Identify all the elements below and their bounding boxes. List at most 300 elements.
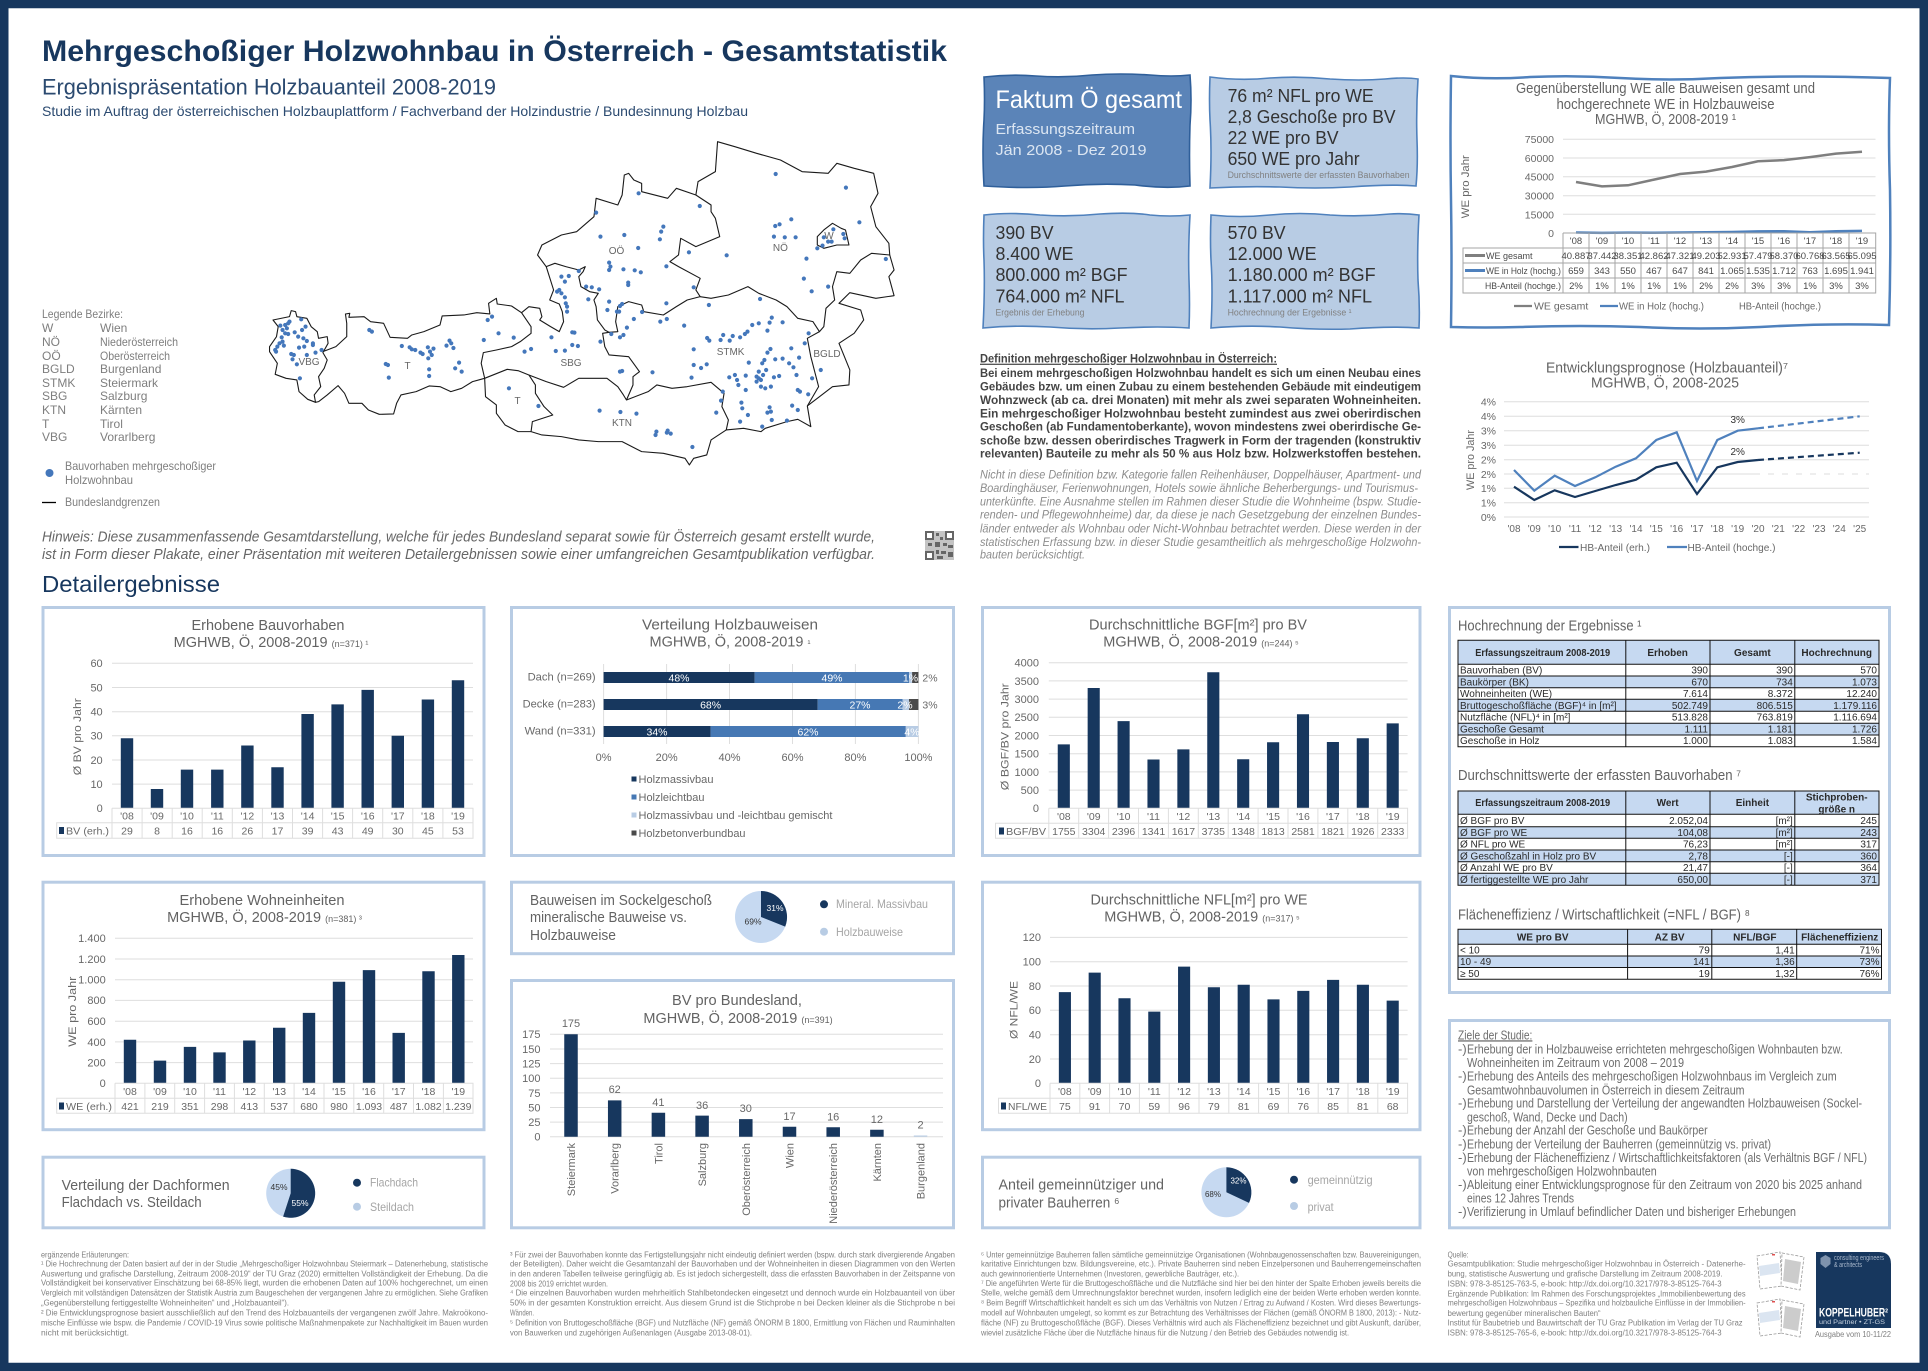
pie legend: Flachdach (370, 1176, 418, 1190)
data table: '18 (421, 810, 435, 822)
text block: definition: relevanten) Bauteile zu mehr als 50 % aus Holz bzw. Holzwerkstoffen bestehen. (980, 447, 1421, 461)
y axis: 50 (528, 1102, 540, 1114)
box: average values (1210, 77, 1418, 188)
chart legend: Holzbetonverbundbau (638, 828, 746, 840)
footnotes column 3: ⁸ Beim Begriff Wirtschaftlichkeit handelt es sich um das Verhältnis von Nutzen / Ertrag zu Aufwand / Kosten. Wird dieses Bewertungs- (981, 1299, 1421, 1308)
bar labels: 3% (922, 700, 938, 712)
bars (1065, 967, 1393, 1083)
table: Durchschnittswerte: 21,47 (1683, 863, 1708, 874)
text block: definition (980, 351, 1422, 562)
data table: '11 (211, 810, 224, 822)
chart title: MGHWB, Ö, 2008-2019 (n=381) ³ (167, 908, 362, 926)
data table: '10 (1117, 811, 1131, 823)
data table: 2% (1569, 281, 1583, 292)
x axis: '25 (1853, 524, 1867, 535)
title: Mehrgeschoßiger Holzwohnbau in Österreich - Gesamtstatistik (42, 35, 947, 68)
data table: 47.321 (1665, 251, 1695, 262)
table: Flächeneffizienz: 1,41 (1775, 946, 1795, 957)
x axis: '22 (1792, 524, 1806, 535)
note: Hinweis: Hinweis: Diese zusammenfassende Gesamtdarstellung, welche für jedes Bundesland separat sowie für Österreich gesamt erstellt wurde, (42, 528, 875, 546)
x axis: '08 (1507, 524, 1521, 535)
table: Flächeneffizienz: 79 (1699, 946, 1710, 957)
study goals list: Gesamtwohnbauvolumen in Österreich in diesem Zeitraum (1467, 1082, 1744, 1097)
table: Hochrechnung: Gesamt (1734, 648, 1771, 659)
data table: '12 (1674, 236, 1686, 247)
panel: Ziele der Studie (1450, 1020, 1890, 1228)
icon: publication thumbnail top (1757, 1252, 1804, 1290)
table: Flächeneffizienz: ≥ 50 (1460, 969, 1480, 980)
pie chart (1201, 1167, 1251, 1217)
text block: definition: renden- und Pflegewohnheime) dar, da diese je nach Gesetzgebung der einzelnen Bundes- (980, 510, 1421, 522)
data table: 29 (121, 826, 133, 838)
table: Flächeneffizienz: 1,32 (1775, 969, 1795, 980)
footnotes column 3: karitative Einrichtungen bzw. Bildungsvereine, etc.). Private Bauherren sind neben Einzelpersonen und Bauherrengemeinschaften (981, 1260, 1421, 1269)
data table: '10 (1118, 1086, 1132, 1098)
logo: Koppelhuber (1816, 1252, 1891, 1328)
y axis: 2% (1481, 469, 1496, 481)
data table: 79 (1208, 1101, 1220, 1113)
y axis: 125 (522, 1058, 540, 1070)
chart legend (632, 774, 832, 840)
footnotes column 1: „Gegenüberstellung fertiggestellte Wohneinheiten“ und „Holzbauanteil“). (41, 1299, 289, 1308)
study goals list: -) (1458, 1177, 1467, 1192)
table: Hochrechnung: 570 (1860, 666, 1877, 676)
legend: districts: Niederösterreich (100, 335, 178, 349)
panel: Erhobene Bauvorhaben (43, 608, 484, 856)
study goals list: Erhebung der in Holzbauweise errichteten mehrgeschoßigen Wohnbauten bzw. (1467, 1041, 1843, 1056)
table: Hochrechnung: Baukörper (BK) (1460, 677, 1529, 688)
table: Hochrechnung: 763.819 (1757, 713, 1793, 724)
bar labels: 68% (700, 700, 721, 712)
y axis: 60000 (1525, 153, 1554, 165)
y axis: 25 (528, 1117, 540, 1129)
data table: 8 (154, 826, 160, 838)
table: Flächeneffizienz: 71% (1859, 946, 1880, 957)
pie chart (266, 1169, 315, 1218)
chart title: MGHWB, Ö, 2008-2019 (n=244) ⁵ (1103, 633, 1299, 651)
data table: '14 (301, 810, 315, 822)
box: extrapolation: Hochrechnung der Ergebnisse ¹ (1228, 308, 1352, 318)
logo: Koppelhuber: KOPPELHUBER² (1819, 1308, 1888, 1320)
legend: districts: Steiermark (100, 376, 159, 390)
data table: '14 (1237, 1086, 1251, 1098)
text block: definition: Nicht in diese Definition bzw. Kategorie fallen Reihenhäuser, Doppelhäuser, Apartment- und (980, 469, 1422, 481)
pie chart: 31% (766, 903, 784, 913)
y axis: WE pro Jahr (1465, 430, 1477, 490)
data table: 81 (1357, 1101, 1369, 1113)
heading: Detailergebnisse: Detailergebnisse (42, 571, 220, 597)
chart title (167, 893, 362, 926)
bar labels (646, 672, 938, 738)
y axis: 3% (1481, 440, 1496, 452)
footnotes column 3 (980, 1250, 1421, 1338)
data table: 1821 (1321, 826, 1345, 838)
footnotes column 2: ⁴ Die einzelnen Bauvorhaben wurden mehrheitlich Stahlbetondecken eingesetzt und dennoch wurde ein Holzbauanteil von über (510, 1289, 955, 1298)
y axis: WE pro Jahr (67, 976, 79, 1047)
data table: 3% (1751, 281, 1765, 292)
panel: Verteilung Holzbauweisen (512, 608, 954, 856)
legend: districts: KTN (42, 403, 66, 417)
data table: 57.479 (1743, 251, 1773, 262)
value labels: 12 (871, 1114, 883, 1126)
chart title: MGHWB, Ö, 2008-2019 ¹ (1595, 110, 1736, 128)
value labels: 175 (562, 1018, 580, 1030)
data table: '13 (1206, 811, 1220, 823)
study goals list: Erhebung der Anzahl der Geschoße und Baukörper (1467, 1123, 1708, 1138)
table: Hochrechnung: 1.000 (1683, 736, 1708, 747)
table: Hochrechnung: 8.372 (1768, 689, 1793, 700)
x axis: '24 (1833, 524, 1846, 535)
data table: '11 (1148, 1086, 1161, 1098)
table: Durchschnittswerte: [m²] (1776, 828, 1793, 839)
x axis: '15 (1650, 524, 1663, 535)
footnotes column 1: nicht mit berücksichtigt. (41, 1329, 129, 1338)
data table: '19 (451, 810, 465, 822)
data table: 49.203 (1691, 251, 1721, 262)
table: Hochrechnung: 390 (1691, 666, 1708, 676)
bars (127, 680, 458, 808)
data table: 16 (181, 826, 193, 838)
category labels: Salzburg (697, 1143, 709, 1186)
x axis: '10 (1548, 524, 1562, 535)
y axis: 75000 (1525, 134, 1554, 146)
legend: districts: Burgenland (100, 362, 161, 376)
y axis: 30000 (1525, 191, 1554, 203)
table: Flächeneffizienz: 141 (1693, 957, 1710, 968)
x axis: '20 (1751, 524, 1765, 535)
data table: '16 (361, 810, 375, 822)
panel text (530, 893, 712, 944)
y axis: 100 (1023, 956, 1041, 968)
map of Austria: W (824, 231, 834, 242)
table: Flächeneffizienz: 76% (1859, 969, 1880, 980)
data table: 647 (1672, 266, 1688, 277)
box: average values: Durchschnittswerte der erfassten Bauvorhaben (1228, 170, 1410, 180)
panel: NFL pro WE (982, 882, 1420, 1130)
chart title: Entwicklungsprognose (Holzbauanteil)⁷ (1546, 361, 1788, 377)
data table: '15 (331, 810, 345, 822)
study goals list: Wohneinheiten im Zeitraum von 2008 – 2019 (1467, 1055, 1684, 1070)
y axis: 175 (522, 1029, 540, 1041)
data table: '14 (1726, 236, 1738, 247)
data table: 980 (330, 1101, 348, 1113)
table: Flächeneffizienz: NFL/BGF (1733, 932, 1776, 943)
study goals list: Verifizierung in Umlauf befindlicher Daten und bisheriger Erhebungen (1467, 1204, 1796, 1219)
data table: '16 (362, 1086, 376, 1098)
bar labels: 2% (922, 672, 938, 684)
footnotes column 1: Vollständigkeit bei konservativer Einschätzung bei 68-85% liegt, wurden die erhobenen Daten auf 100% hochgerechnet, um einen (41, 1279, 488, 1288)
data table: 2396 (1112, 826, 1135, 838)
map of Austria: KTN (612, 418, 632, 429)
x axis: '13 (1609, 524, 1623, 535)
data table (57, 808, 473, 838)
data table: '18 (422, 1086, 436, 1098)
footnotes column 2: in den anderen Tabellen teilweise geringfügig ab. Es ist jedoch sichergestellt, dass die erfassten Bauvorhaben in der Zeitspanne von (510, 1270, 955, 1279)
data table: '17 (392, 1086, 406, 1098)
pie chart: 55% (291, 1198, 309, 1208)
y axis: 200 (87, 1058, 106, 1070)
table: Durchschnittswerte: 364 (1860, 863, 1877, 874)
panel: Sockelgeschoß (512, 882, 954, 954)
text block: definition: Wohnzweck (ab ca. drei Monaten) mit mehr als zwei separaten Wohneinheiten. (980, 393, 1421, 407)
x axis: '23 (1812, 524, 1826, 535)
y axis: 30 (90, 730, 103, 742)
data table: 1926 (1351, 826, 1375, 838)
data table: 1755 (1052, 826, 1076, 838)
footnotes column 3: modell auf Wohnbauten umgelegt, so kommt es zur Betrachtung des Verhältnisses der Flächen (gemäß ÖNORM B 1800, 2013): - Nutz- (981, 1308, 1421, 1317)
data table: 413 (241, 1101, 258, 1113)
category labels: Niederösterreich (828, 1143, 840, 1224)
data table: 30 (392, 826, 404, 838)
data table: 467 (1646, 266, 1662, 277)
panel: Bauherren (982, 1157, 1420, 1228)
y axis: 800 (87, 995, 106, 1007)
data table (996, 808, 1408, 838)
table: Durchschnittswerte: Erfassungszeitraum 2008-2019 (1475, 798, 1611, 809)
table: Durchschnittswerte: 360 (1860, 851, 1877, 862)
table: Durchschnittswerte: Einheit (1736, 798, 1770, 809)
chart legend: HB-Anteil (erh.) (1580, 542, 1650, 554)
data table: '14 (302, 1086, 316, 1098)
panel text: mineralische Bauweise vs. (530, 910, 687, 926)
table: Durchschnittswerte: [-] (1784, 851, 1793, 862)
data table: 298 (211, 1101, 228, 1113)
table: Hochrechnung: 502.749 (1672, 701, 1708, 712)
y axis: 4% (1481, 411, 1496, 423)
y axis: 1.200 (78, 954, 106, 966)
table: Flächeneffizienz: 1,36 (1775, 957, 1795, 968)
legend: project dot (46, 459, 216, 487)
map of Austria: SBG (560, 358, 582, 369)
data table: 76 (1297, 1101, 1309, 1113)
y axis (1460, 134, 1554, 240)
data table: '17 (1804, 236, 1816, 247)
data table: '19 (1386, 1086, 1400, 1098)
table: Durchschnittswerte: 245 (1860, 816, 1877, 827)
category labels: Decke (n=283) (523, 699, 596, 711)
data table: 52.931 (1717, 251, 1747, 262)
footnotes column 3: Stelle, welche gemäß dem Umrechnungsfaktor berechnet wurden, insofern lediglich eine der beiden Werte erhoben werden konnte. (981, 1289, 1421, 1298)
study goals list: -) (1458, 1069, 1467, 1084)
chart title: Durchschnittliche NFL[m²] pro WE (1090, 892, 1308, 908)
data table: HB-Anteil (hochge.) (1485, 281, 1561, 291)
data table: 351 (181, 1101, 199, 1113)
table: Durchschnittswerte: [-] (1784, 875, 1793, 886)
footnotes column 2: der Beteiligten). Daher weicht die Gesamtanzahl der Bauvorhaben und der Wohneinheiten in diesen Diagrammen von den Werten (510, 1260, 955, 1269)
category labels (523, 672, 596, 738)
pie legend: Steildach (370, 1200, 414, 1214)
y axis: 0 (97, 803, 103, 815)
table: Flächeneffizienz: 73% (1859, 957, 1880, 968)
data table: 60.768 (1795, 251, 1825, 262)
footnotes column 1: Auswertung und grafische Darstellung, Zeitraum 2008-2019“ der TU Graz (2020) ermittelten Vollständigkeit der Erhebung. Da die (41, 1269, 488, 1278)
text block: definition: Boardinghäuser, Ferienwohnungen, Hotels sowie ähnliche Beherbergungs- und Tourismus- (980, 483, 1418, 495)
data table: '09 (150, 810, 164, 822)
pie chart (735, 891, 787, 943)
chart title: MGHWB, Ö, 2008-2019 ¹ (650, 633, 810, 651)
data table: 39 (302, 826, 314, 838)
data table: '12 (1177, 1086, 1191, 1098)
y axis: 2000 (1015, 730, 1039, 742)
y axis: 150 (522, 1044, 540, 1056)
data table: 75 (1059, 1101, 1071, 1113)
y axis: 60 (1029, 1005, 1041, 1017)
subtitle: Ergebnispräsentation Holzbauanteil 2008-2019 (42, 74, 496, 100)
panel: comparison chart WE (1450, 76, 1890, 328)
pie chart: 45% (270, 1182, 288, 1192)
box: extrapolation: 1.117.000 m² NFL (1228, 286, 1372, 307)
table: Hochrechnung: Geschoße Gesamt (1460, 724, 1544, 736)
data table: '15 (1267, 1086, 1281, 1098)
sources: Quelle: (1448, 1250, 1469, 1259)
text block: definition: Gebäudes bzw. um einen Zubau zu einem bestehenden Gebäude mit eindeutigem (980, 379, 1421, 393)
footnotes column 3: ⁶ Unter gemeinnützige Bauherren fallen sämtliche gemeinnützige Organisationen (Wohnbaugenossenschaften bzw. Bauvereinigungen, (981, 1250, 1421, 1259)
stacked bars (604, 672, 918, 737)
value labels: 2 (918, 1120, 924, 1132)
y axis: 0% (1481, 512, 1496, 524)
data table: 1.535 (1746, 266, 1770, 277)
panel: BGF pro BV (982, 608, 1420, 856)
y axis: 1% (1481, 483, 1496, 495)
text block: definition: schoße bzw. dessen oberirdisches Tragwerk in Form der tragenden (konstruktiv (980, 433, 1421, 447)
chart title: Erhobene Wohneinheiten (180, 893, 344, 909)
bar labels: 1% (903, 672, 918, 684)
chart title (1546, 361, 1788, 392)
data table: '12 (242, 1086, 256, 1098)
study goals list: von mehrgeschoßigen Holzwohnbauten (1467, 1163, 1657, 1178)
panel: BV pro Bundesland (512, 980, 954, 1228)
y axis: 15000 (1525, 209, 1554, 221)
legend: districts: VBG (42, 430, 67, 444)
data table: 3304 (1082, 826, 1106, 838)
chart legend (1559, 542, 1776, 554)
table: Hochrechnung: 1.726 (1852, 724, 1877, 736)
data table: 1.941 (1850, 266, 1874, 277)
footnotes column 2: ⁵ Definition von Bruttogeschoßfläche (BGF) und Nutzfläche (NF) gemäß ÖNORM B 1800, Ermittlung von Flächen und Rauminhalten (510, 1319, 955, 1328)
box: survey result: 8.400 WE (996, 243, 1074, 264)
table: Durchschnittswerte: 76,23 (1683, 840, 1708, 851)
text block: definition: Definition mehrgeschoßiger Holzwohnbau in Österreich: (980, 351, 1277, 366)
x axis: '11 (1569, 524, 1582, 535)
y axis: 50 (90, 682, 103, 694)
study goals list: -) (1458, 1204, 1467, 1219)
data table: 1.239 (445, 1101, 472, 1113)
y axis: Ø BV pro Jahr (72, 698, 84, 775)
bar labels: 27% (849, 700, 871, 712)
x axis (1507, 524, 1867, 535)
data table: 17 (272, 826, 283, 838)
y axis: 0 (100, 1078, 106, 1090)
data table: 421 (121, 1101, 139, 1113)
footnotes column 3: auch gewinnorientierte Unternehmen (Investoren, gewerbliche Bauträger, etc.). (981, 1270, 1239, 1279)
x axis: '18 (1711, 524, 1724, 535)
data table: 659 (1568, 266, 1584, 277)
data table: '09 (153, 1086, 167, 1098)
legend: districts: Oberösterreich (100, 349, 170, 363)
data table: 1.093 (356, 1101, 382, 1113)
table: Durchschnittswerte: 371 (1860, 875, 1877, 886)
data table: 49 (362, 826, 374, 838)
data labels: 2% (1730, 447, 1745, 458)
footnotes column 2: 50% in der gesamten Konstruktion erreicht. Aus diesem Grund ist die Stichprobe n bei Decken kleiner als die Stichprobe n bei (510, 1299, 955, 1308)
panel text: Flachdach vs. Steildach (62, 1195, 202, 1211)
y axis: 1% (1481, 498, 1496, 510)
table: Hochrechnung: 1.073 (1852, 677, 1877, 688)
table: Flächeneffizienz: 10 - 49 (1460, 957, 1492, 968)
data table: '19 (451, 1086, 465, 1098)
table: Hochrechnung: 1.116.694 (1833, 713, 1877, 724)
data table: '15 (1266, 811, 1280, 823)
table: Flächeneffizienz: < 10 (1460, 946, 1480, 957)
panel text: Verteilung der Dachformen (62, 1178, 230, 1194)
box: extrapolation (1210, 214, 1419, 329)
y axis (72, 658, 103, 815)
chart legend: HB-Anteil (hochge.) (1739, 300, 1821, 312)
data table (57, 1083, 473, 1113)
chart title (1516, 81, 1815, 128)
table: Hochrechnung: 1.179.116 (1833, 701, 1877, 712)
category labels: Vorarlberg (610, 1143, 622, 1194)
legend: districts: Kärnten (100, 403, 142, 417)
footnotes column 3: ⁷ Die angeführten Werte für die Bruttogeschoßfläche und die Nutzfläche sind hier bei den hinter der Spalte Erhoben jeweils bereits die (981, 1279, 1421, 1288)
pie chart: 32% (1230, 1176, 1247, 1186)
x axis: '14 (1629, 524, 1643, 535)
bars (571, 1034, 877, 1137)
x axis: 40% (718, 752, 741, 764)
y axis: 60 (90, 658, 103, 670)
data table: '11 (1648, 236, 1660, 247)
y axis: 3000 (1015, 694, 1039, 706)
study goals list: -) (1458, 1041, 1467, 1056)
study goals list: Erhebung des Anteils des mehrgeschoßigen Holzwohnbaus im Vergleich zum (1467, 1069, 1837, 1084)
data table: 1.712 (1772, 266, 1796, 277)
data table: 65.095 (1847, 251, 1877, 262)
data table: 1.695 (1824, 266, 1848, 277)
box: Faktum Ö gesamt: Jän 2008 - Dez 2019 (996, 143, 1146, 159)
table: Durchschnittswerte: Ø NFL pro WE (1460, 840, 1526, 851)
x axis: '09 (1528, 524, 1541, 535)
data table: 3% (1855, 281, 1869, 292)
value labels: 36 (696, 1100, 708, 1112)
box: Faktum Ö gesamt (983, 74, 1191, 188)
pie chart: 69% (744, 916, 762, 926)
panel text: Bauweisen im Sockelgeschoß (530, 893, 712, 909)
map of Austria (270, 142, 894, 465)
text block: definition: Geschoßen (ab Fundamentoberkante), wovon mindestens zwei oberirdische Ge- (980, 420, 1421, 434)
data table: '13 (272, 1086, 286, 1098)
y axis: 0 (1035, 1078, 1041, 1090)
data table: 37.442 (1587, 251, 1617, 262)
QR code (925, 531, 954, 560)
panel: Dachformen (43, 1157, 484, 1228)
table: Hochrechnung: 806.515 (1757, 701, 1793, 712)
bar labels: 62% (797, 726, 819, 738)
chart legend: WE gesamt (1534, 300, 1588, 312)
map of Austria: VBG (298, 357, 320, 368)
value labels: 41 (652, 1097, 665, 1109)
pie legend: Mineral. Massivbau (836, 897, 928, 911)
panel: tables (1450, 608, 1890, 992)
legend: project dot: Holzwohnbau (65, 473, 133, 487)
data table: 537 (270, 1101, 288, 1113)
chart title: Durchschnittliche BGF[m²] pro BV (1089, 617, 1307, 633)
legend: districts: SBG (42, 389, 67, 403)
pie legend (1290, 1173, 1373, 1214)
table: Hochrechnung: 670 (1691, 677, 1708, 688)
footnotes column 2: 2008 bis 2019 errichtet wurden. (510, 1280, 608, 1289)
data table: 40.887 (1561, 251, 1591, 262)
data table: '09 (1088, 1086, 1102, 1098)
